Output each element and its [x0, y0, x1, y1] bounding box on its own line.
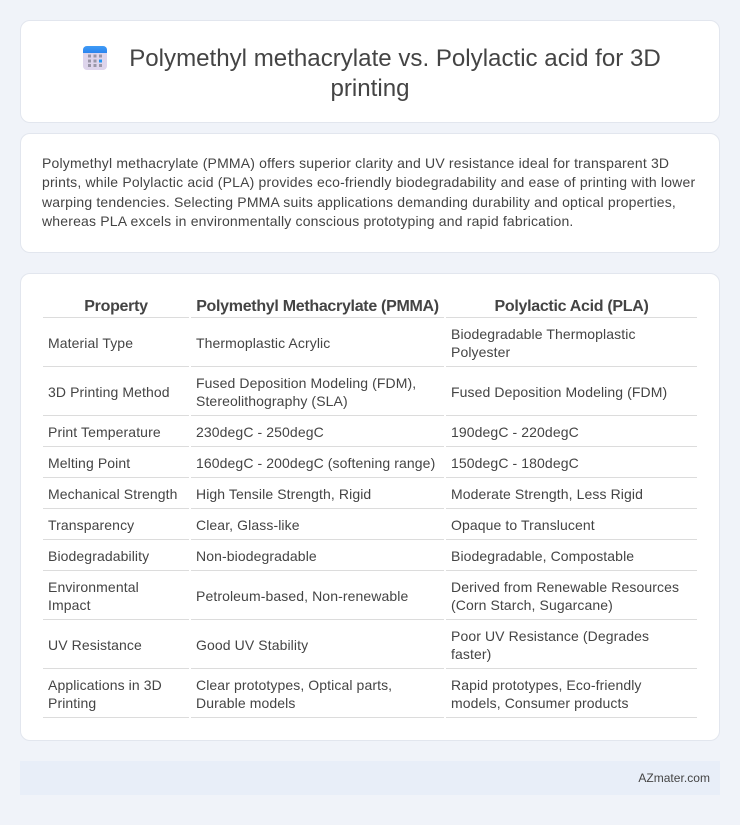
comparison table: Melting Point: [48, 454, 130, 470]
intro text: Polymethyl methacrylate (PMMA) offers superior clarity and UV resistance ideal for transparent 3D: [42, 155, 669, 171]
comparison table: Environmental: [48, 578, 139, 594]
comparison table: 3D Printing Method: [48, 384, 170, 400]
intro text: prints, while Polylactic acid (PLA) provides eco-friendly biodegradability and ease of printing with lower: [42, 174, 695, 190]
comparison table: Moderate Strength, Less Rigid: [451, 486, 643, 502]
comparison table: faster): [451, 646, 491, 662]
comparison table: Transparency: [48, 516, 134, 532]
footer credit: AZmater.com: [638, 771, 710, 785]
comparison table: Property: [84, 298, 148, 315]
comparison table: Stereolithography (SLA): [196, 392, 348, 408]
comparison table: Derived from Renewable Resources: [451, 578, 679, 594]
comparison table: 160degC - 200degC (softening range): [196, 454, 435, 470]
comparison table: Fused Deposition Modeling (FDM): [451, 384, 667, 400]
comparison table: Printing: [48, 694, 96, 710]
header panel: [20, 20, 720, 123]
intro panel: [20, 133, 720, 253]
comparison table: Polyester: [451, 344, 510, 360]
comparison table: 190degC - 220degC: [451, 424, 579, 440]
comparison table: Mechanical Strength: [48, 486, 178, 502]
comparison table: Biodegradability: [48, 548, 149, 564]
comparison table: Biodegradable Thermoplastic: [451, 326, 636, 342]
comparison table: Fused Deposition Modeling (FDM),: [196, 374, 416, 390]
comparison table: Applications in 3D: [48, 676, 162, 692]
icon: calendar: [83, 46, 107, 70]
intro text: warping tendencies. Selecting PMMA suits applications demanding durability and optical properties,: [42, 194, 676, 210]
intro text: whereas PLA excels in environmentally conscious prototyping and rapid fabrication.: [42, 213, 574, 229]
comparison table: Clear, Glass-like: [196, 516, 300, 532]
comparison table panel: [20, 273, 720, 741]
comparison table: Durable models: [196, 694, 295, 710]
footer bar: [20, 761, 720, 795]
comparison table: Polymethyl Methacrylate (PMMA): [196, 298, 439, 315]
comparison table: 150degC - 180degC: [451, 454, 579, 470]
comparison table: [43, 298, 697, 718]
comparison table: Rapid prototypes, Eco-friendly: [451, 676, 642, 692]
comparison table: Biodegradable, Compostable: [451, 548, 634, 564]
comparison table: Polylactic Acid (PLA): [494, 298, 649, 315]
comparison table: Impact: [48, 596, 91, 612]
comparison table: Opaque to Translucent: [451, 516, 595, 532]
comparison table: Print Temperature: [48, 424, 161, 440]
comparison table: 230degC - 250degC: [196, 424, 324, 440]
title: printing: [330, 75, 410, 102]
comparison table: High Tensile Strength, Rigid: [196, 486, 371, 502]
title: [129, 45, 661, 102]
intro text: [42, 155, 695, 229]
comparison table: (Corn Starch, Sugarcane): [451, 596, 613, 612]
comparison table: Petroleum-based, Non-renewable: [196, 588, 408, 604]
comparison table: Good UV Stability: [196, 636, 308, 652]
comparison table: Clear prototypes, Optical parts,: [196, 676, 392, 692]
comparison table: Non-biodegradable: [196, 548, 317, 564]
comparison table: models, Consumer products: [451, 694, 629, 710]
comparison table: Poor UV Resistance (Degrades: [451, 628, 649, 644]
comparison table: UV Resistance: [48, 636, 142, 652]
title: Polymethyl methacrylate vs. Polylactic acid for 3D: [129, 45, 661, 72]
comparison table: Thermoplastic Acrylic: [196, 334, 330, 350]
comparison table: Material Type: [48, 334, 133, 350]
